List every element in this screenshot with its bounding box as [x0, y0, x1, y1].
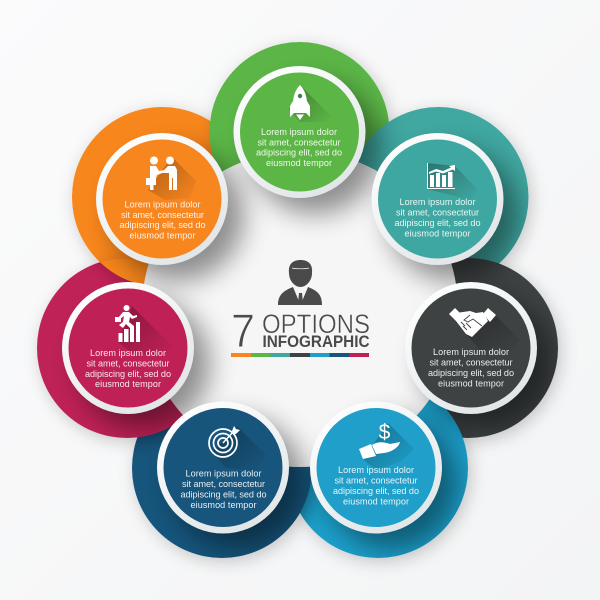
icon: business partners: [146, 156, 196, 200]
text block: Lorem ipsum dolor: [186, 468, 262, 478]
icon: rocket: [289, 85, 332, 122]
cast shadows of option circles: [78, 82, 553, 549]
text block: sit amet, consectetur: [86, 358, 170, 368]
text block: Lorem ipsum dolor: [124, 200, 200, 210]
center heading: [231, 260, 370, 357]
text block: Lorem ipsum dolor: [261, 127, 337, 137]
text block: Lorem ipsum dolor: [400, 197, 476, 207]
text block: adipiscing elit, sed do: [85, 369, 171, 379]
panel: option teal chart: [372, 133, 504, 265]
text block: eiusmod tempor: [404, 228, 470, 238]
text block: adipiscing elit, sed do: [428, 368, 514, 378]
central disc: [142, 151, 458, 467]
color legend bar: [231, 353, 369, 357]
text block: adipiscing elit, sed do: [333, 486, 419, 496]
panel: option green rocket: [234, 66, 366, 198]
text block: eiusmod tempor: [130, 230, 196, 240]
icon: hand with dollar: $: [379, 421, 391, 444]
text block: sit amet, consectetur: [334, 476, 418, 486]
text block: sit amet, consectetur: [258, 137, 340, 147]
icon: businessman: [278, 260, 322, 305]
panel: option orange partners: [96, 133, 228, 265]
text block: eiusmod tempor: [95, 379, 161, 389]
heading: 7: 7: [231, 304, 255, 357]
text block: adipiscing elit, sed do: [180, 490, 266, 500]
text block: Lorem ipsum dolor: [433, 347, 509, 357]
text block: eiusmod tempor: [438, 378, 504, 388]
text block: Lorem ipsum dolor: [338, 465, 414, 475]
panel: option crimson runner: [62, 282, 194, 414]
panel: option blue money: [310, 402, 442, 534]
text block: sit amet, consectetur: [121, 210, 204, 220]
text block: sit amet, consectetur: [182, 479, 265, 489]
text block: eiusmod tempor: [266, 158, 332, 168]
text block: Lorem ipsum dolor: [90, 348, 166, 358]
text block: sit amet, consectetur: [430, 358, 512, 368]
text block: adipiscing elit, sed do: [120, 220, 206, 230]
icon: target with arrow: [209, 426, 266, 470]
panel: option navy target: [157, 402, 289, 534]
heading: OPTIONS: OPTIONS: [262, 309, 370, 339]
icon: handshake: [449, 308, 520, 352]
colored ring arcs behind the option circles: [37, 42, 558, 558]
text block: eiusmod tempor: [190, 500, 256, 510]
icon: runner on rising bars: [115, 305, 172, 356]
text block: sit amet, consectetur: [396, 208, 479, 218]
heading: INFOGRAPHIC: INFOGRAPHIC: [262, 333, 370, 351]
icon: bar chart: [427, 163, 478, 200]
panel: option dark handshake: [405, 282, 537, 414]
text block: adipiscing elit, sed do: [256, 148, 342, 158]
text block: adipiscing elit, sed do: [394, 218, 480, 228]
text block: eiusmod tempor: [343, 496, 409, 506]
